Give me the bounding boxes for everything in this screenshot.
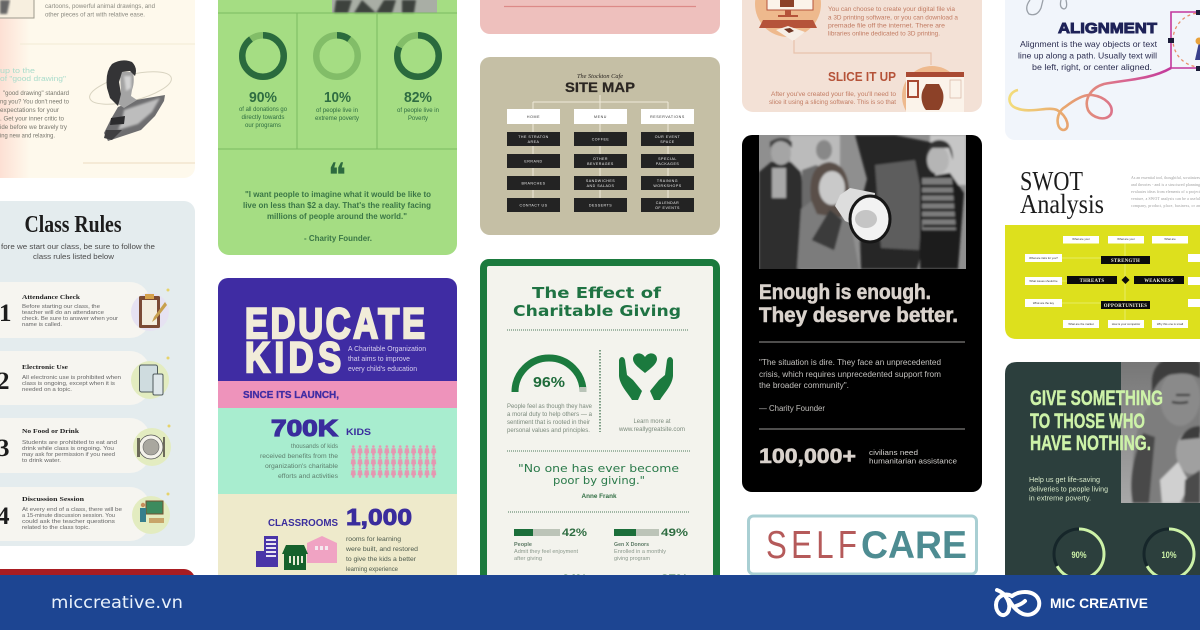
- text: slice: After you've created your file, you'll need to: [771, 91, 897, 98]
- title: educate kids: KIDS: [245, 334, 346, 382]
- text: good drawing body: expectations for your: [0, 107, 59, 114]
- icon: green building: [282, 545, 308, 570]
- text: organisation description: [348, 344, 426, 373]
- rule row 2: electronic use: [0, 351, 170, 405]
- panel: class rules: [0, 201, 195, 546]
- text: help us: [1029, 477, 1108, 502]
- heading: good drawing: [0, 66, 66, 83]
- footer bar: [0, 575, 1200, 630]
- quote: crisis, which requires unprecedented support from: [759, 370, 941, 379]
- band: 700K kids: KIDS: [346, 427, 371, 438]
- sitemap column: home: ERRAND: [524, 160, 543, 164]
- sitemap column: menu: COFFEE: [592, 138, 609, 142]
- stat: 90 percent: 90%: [249, 89, 277, 106]
- stat bar: 49 percent gen x: Gen X Donors: [614, 542, 649, 548]
- text: organisation description: every child's education: [348, 364, 417, 373]
- text: help us: Help us get life-saving: [1029, 477, 1100, 484]
- sitemap column: reservations: SPECIAL: [658, 157, 677, 161]
- footer brand name: MIC CREATIVE: [1050, 595, 1148, 611]
- illustration: colour curve: [1009, 68, 1171, 130]
- icon: purple tower: [256, 536, 278, 567]
- text: alignment definition: Alignment is the way objects or text: [1020, 39, 1158, 49]
- stat bar: 42 percent people: 42%: [562, 527, 587, 539]
- title: effect of charitable giving: [513, 284, 681, 320]
- band: since its launch: SINCE ITS LAUNCH,: [243, 389, 339, 401]
- title: educate kids: EDUCATE: [245, 300, 428, 348]
- band: classrooms 1,000: to give the kids a better: [346, 556, 417, 563]
- text: moral duty: [507, 403, 592, 434]
- rule row 1: attendance check: Before starting our class, the: [22, 304, 100, 310]
- text: swot description: and theories - and is a structured planning: [1131, 183, 1200, 187]
- prompt text: What are the market: [1068, 322, 1094, 326]
- sitemap column: menu: BEVERAGES: [587, 162, 614, 166]
- band: classrooms 1,000: 1,000: [346, 504, 412, 530]
- rule row 2: electronic use: Electronic Use: [22, 364, 68, 371]
- band: 700K kids: received benefits from the: [260, 453, 338, 460]
- icon: clipboard: [131, 288, 170, 331]
- rule row 4: discussion session: could ask the teacher questions: [22, 519, 116, 525]
- heading: good drawing: up to the: [0, 66, 35, 75]
- title: effect of charitable giving: The Effect of: [532, 284, 661, 302]
- title: swot analysis: SWOT: [1020, 166, 1083, 196]
- band: classrooms 1,000: were built, and restored: [345, 546, 418, 553]
- rule row 4: discussion session: Discussion Session: [22, 496, 84, 503]
- sitemap column: home: [507, 109, 560, 212]
- rule row 4: discussion session: [0, 487, 170, 541]
- title: site map: The Stockton Cafe: [577, 73, 623, 80]
- stat: 10 percent: [315, 89, 359, 122]
- title: site map: [565, 73, 635, 95]
- text: help us: in extreme poverty.: [1029, 496, 1091, 502]
- stat: 82 percent: 82%: [404, 89, 432, 106]
- text: intro end: other pieces of art with relative ease.: [45, 12, 145, 18]
- prompt text: [1029, 237, 1184, 326]
- stat bar: 49 percent gen x: [614, 527, 688, 562]
- stat: 82 percent: Poverty: [408, 116, 428, 122]
- quote: [759, 358, 941, 413]
- sitemap column: home: THE STRATON: [518, 135, 549, 139]
- stat bar: 42 percent people: [514, 527, 587, 562]
- quote: anne frank: "No one has ever become: [518, 462, 679, 475]
- pictogram: rows of children: [350, 445, 437, 478]
- text: help us: deliveries to people living: [1029, 486, 1108, 494]
- quote: anne frank: [518, 462, 679, 500]
- sitemap column: reservations: CALENDAR: [656, 201, 679, 205]
- rule row 1: attendance check: [0, 282, 170, 338]
- band: 700K kids: efforts and activities: [278, 473, 339, 480]
- title: swot analysis: [1020, 166, 1104, 219]
- prompt text: What are risks for you?: [1029, 256, 1058, 260]
- panel: green charity donuts: [218, 0, 457, 255]
- stat: 90 percent: directly towards: [242, 115, 284, 121]
- cut-off stats: [562, 573, 688, 585]
- quote text: [243, 190, 431, 243]
- panel: alignment: [1005, 0, 1200, 140]
- text: alignment definition: line up along a path. Usually text will: [1018, 50, 1157, 60]
- sitemap column: reservations: OF EVENTS: [655, 206, 680, 210]
- footer site url: miccreative.vn: [51, 593, 183, 613]
- prompt text: How is your competitor: [1112, 322, 1140, 326]
- cut-off stats: 37%: [661, 573, 688, 585]
- headline: [1030, 387, 1163, 455]
- icon: hands holding heart: [619, 353, 673, 400]
- panel: site map: [480, 57, 720, 235]
- rule row 3: no food or drink: drink while class is ongoing. You: [22, 446, 114, 452]
- text: swot description: As an essential tool, thoughtful, scrutinizes: [1131, 176, 1200, 181]
- title: educate kids: [245, 300, 428, 382]
- sitemap column: reservations: WORKSHOPS: [653, 184, 682, 188]
- sitemap column: home: BRANCHES: [522, 182, 546, 186]
- panel: effect of charitable giving: [480, 259, 720, 589]
- stat: 90 percent: [239, 89, 288, 129]
- stat bar: 42 percent people: Admit they feel enjoyment: [514, 549, 578, 555]
- text: digital file: You can choose to create your digital file via: [828, 6, 956, 13]
- text: digital file: libraries online dedicated to 3D printing.: [828, 30, 940, 38]
- icon: teacher at blackboard: [132, 492, 170, 534]
- text: learn more: Learn more at: [634, 418, 671, 425]
- gauge: 96 percent: [515, 358, 586, 392]
- category label text: THREATS: [1080, 279, 1104, 284]
- panel: educate kids: [218, 278, 457, 584]
- category label text: STRENGTH: [1111, 259, 1140, 264]
- rule row 4: discussion session: related to the class topic.: [22, 525, 90, 531]
- rule row 4: discussion session: At every end of a class, there will be: [22, 507, 122, 513]
- category label text: OPPORTUNITIES: [1104, 304, 1147, 309]
- text: intro end: cartoons, powerful animal drawings, and: [45, 3, 155, 10]
- photo strip: [332, 0, 437, 13]
- sitemap column: menu: AND SALADS: [587, 184, 614, 188]
- quote: the broader community".: [759, 381, 849, 390]
- quote: — Charity Founder: [759, 404, 825, 413]
- ring: 10 percent: 10%: [1162, 550, 1176, 560]
- quote: "The situation is dire. They face an unprecedented: [759, 358, 941, 367]
- icon: MIC Creative logo: [996, 590, 1039, 615]
- sitemap column: home: HOME: [527, 115, 540, 119]
- text: digital file: [828, 6, 958, 38]
- rule row 4: discussion session: a 15-minute discussion session. You: [22, 513, 115, 519]
- prompt text: What are: [1164, 237, 1176, 241]
- ring: 90 percent: 90%: [1072, 550, 1086, 560]
- sitemap column: menu: [574, 109, 627, 212]
- band: classrooms 1,000: rooms for learning: [346, 536, 401, 543]
- icon: quotation marks: ❝: [328, 156, 346, 196]
- title: site map: SITE MAP: [565, 79, 635, 95]
- sitemap column: reservations: SPACE: [660, 140, 675, 144]
- donut: 82 percent: [397, 35, 439, 77]
- headline: TO THOSE WHO: [1030, 410, 1145, 433]
- text: intro end: [45, 3, 155, 18]
- stat: 90 percent: our programs: [245, 123, 281, 129]
- text: digital file: a 3D printing software, or you can download a: [828, 14, 958, 22]
- rule row 2: electronic use: All electronic use is prohibited when: [22, 375, 121, 381]
- text: digital file: premade file off the internet. There are: [828, 22, 946, 30]
- text: moral duty: a moral duty to help others — a: [507, 411, 592, 418]
- band: classrooms 1,000: CLASSROOMS: [268, 518, 338, 529]
- stat bar: 49 percent gen x: 49%: [661, 527, 688, 539]
- text: swot description: [1131, 176, 1200, 209]
- prompt text: What are the key: [1033, 301, 1055, 305]
- panel: self care: CARE: [861, 524, 967, 567]
- rule row 3: no food or drink: may ask for permission if you need: [22, 452, 115, 458]
- text: good drawing body: . Get your inner critic to: [0, 116, 64, 122]
- text: organisation description: that aims to improve: [348, 354, 410, 363]
- panel: give something: [1005, 358, 1200, 590]
- prompt text: Why this one is small: [1157, 322, 1184, 326]
- rule row 1: attendance check: Attendance Check: [22, 294, 80, 301]
- band: 700K kids: thousands of kids: [291, 443, 339, 450]
- panel: red card: [0, 569, 195, 609]
- text: class rules intro: fore we start our class, be sure to follow the: [1, 242, 155, 251]
- yellow swot board: [1005, 225, 1200, 339]
- image frame top left: [0, 0, 34, 18]
- text: swot description: company, product, place, business, or an: [1131, 204, 1200, 209]
- rule row 3: no food or drink: to drink water.: [22, 458, 61, 464]
- heading: slice it up: SLICE IT UP: [828, 69, 896, 84]
- heading: alignment: ALIGNMENT: [1058, 21, 1157, 37]
- heading: good drawing: of "good drawing": [0, 74, 66, 83]
- title: effect of charitable giving: Charitable Giving: [513, 302, 681, 320]
- panel: 3D printing steps: [742, 0, 982, 112]
- text: good drawing body: [0, 90, 69, 140]
- text: good drawing body: "good drawing" standard: [3, 90, 69, 97]
- stat caption: [869, 448, 957, 466]
- quote text: "I want people to imagine what it would be like to: [245, 190, 431, 199]
- quote text: - Charity Founder.: [304, 234, 372, 243]
- sitemap column: home: AREA: [528, 140, 539, 144]
- rule row 1: attendance check: check. Be sure to answer when your: [22, 316, 118, 322]
- rule row 1: attendance check: teacher will do an attendance: [22, 310, 104, 316]
- stat bar: 49 percent gen x: Enrolled in a monthly: [614, 549, 666, 555]
- quote: anne frank: poor by giving.": [553, 474, 645, 487]
- headline: HAVE NOTHING.: [1030, 432, 1151, 455]
- sitemap column: home: CONTACT US: [519, 204, 548, 208]
- sitemap column: menu: MENU: [594, 115, 607, 119]
- text: moral duty: personal values and principles.: [507, 427, 590, 434]
- ring: 10 percent: [1144, 529, 1194, 579]
- text: swot description: evaluates ideas from elements of a project: [1131, 190, 1200, 194]
- stat: 82 percent: [397, 89, 439, 122]
- stat bar: 42 percent people: People: [514, 542, 532, 548]
- ring: 90 percent: [1054, 529, 1104, 579]
- panel: self care: SELF: [766, 524, 861, 567]
- sitemap column: reservations: RESERVATIONS: [650, 115, 685, 119]
- text: swot description: venture, a SWOT analysis can be a useful: [1131, 197, 1200, 202]
- title: class rules: Class Rules: [24, 212, 122, 238]
- prompt text: What issues should be: [1029, 279, 1058, 283]
- text: organisation description: A Charitable Organization: [348, 344, 426, 353]
- photo: children: [1121, 358, 1200, 503]
- text: learn more: www.reallygreatsite.com: [618, 426, 685, 433]
- cut-off stats: 64%: [562, 573, 587, 585]
- donut: 10 percent: [316, 35, 358, 77]
- panel: self care: [748, 516, 976, 574]
- category label text: [1080, 259, 1174, 309]
- panel: drawing tips (cream): [0, 0, 195, 178]
- stat: 10 percent: of people live in: [316, 108, 358, 114]
- quote text: live on less than $2 a day. That's the reality facing: [243, 201, 431, 210]
- rule row 3: no food or drink: [0, 418, 171, 473]
- text: slice: [769, 91, 897, 106]
- category label text: WEAKNESS: [1144, 279, 1174, 284]
- band: 700K kids: [218, 408, 457, 494]
- photo: protest with megaphone: [759, 135, 966, 272]
- rule row 3: no food or drink: Students are prohibited to eat and: [22, 440, 117, 446]
- band: classrooms 1,000: learning experience: [346, 566, 398, 573]
- text: good drawing body: ng you? You don't need to: [0, 98, 69, 106]
- illustration: alignment frame: [1168, 10, 1200, 71]
- icon: pink house: [307, 536, 337, 563]
- text: moral duty: sentiment that is rooted in their: [507, 419, 590, 426]
- headline: They deserve better.: [759, 304, 958, 327]
- gauge: 96 percent: 96%: [533, 374, 565, 391]
- stat: 100,000+: 100,000+: [759, 445, 856, 468]
- rule row 2: electronic use: needed on a topic.: [22, 387, 72, 393]
- icon: statue bust with orbit ring: [87, 60, 174, 141]
- stat caption: civilians need: [869, 448, 918, 457]
- text: alignment definition: [1018, 39, 1158, 72]
- sitemap column: reservations: TRAINING: [657, 179, 678, 183]
- sitemap column: menu: DESSERTS: [589, 204, 612, 208]
- stat bar: 42 percent people: after giving: [514, 556, 542, 562]
- panel: pink card: [480, 0, 720, 34]
- text: good drawing body: ide before we bravely try: [0, 124, 68, 131]
- stat: 10 percent: extreme poverty: [315, 116, 359, 122]
- text: good drawing body: ing new and relaxing.: [0, 132, 55, 140]
- band: since its launch: [218, 381, 457, 408]
- text: alignment definition: be left, right, or center aligned.: [1032, 62, 1152, 72]
- title: swot analysis: Analysis: [1020, 189, 1104, 219]
- rule row 3: no food or drink: No Food or Drink: [22, 428, 79, 435]
- text: slice: slice it using a slicing software. This is so that: [769, 99, 896, 106]
- band: classrooms 1,000: [218, 494, 457, 584]
- stat bar: 49 percent gen x: giving program: [614, 556, 650, 562]
- icon: computer with circle: [755, 0, 821, 41]
- stat: 82 percent: of people live in: [397, 108, 439, 114]
- panel: swot analysis: [1005, 166, 1200, 339]
- quote: anne frank: Anne Frank: [582, 493, 617, 500]
- prompt text: What are your: [1072, 237, 1090, 241]
- icon: slicing software window: [902, 66, 964, 112]
- band: 700K kids: 700K: [271, 415, 338, 441]
- rule row 1: attendance check: name is called.: [22, 322, 62, 328]
- sitemap column: menu: SANDWICHES: [586, 179, 615, 183]
- quote text: millions of people around the world.": [267, 212, 407, 221]
- stat: 90 percent: of all donations go: [239, 107, 288, 113]
- stat: 10 percent: 10%: [324, 89, 351, 106]
- sitemap column: reservations: PACKAGES: [656, 162, 679, 166]
- band: 700K kids: organization's charitable: [265, 463, 338, 470]
- stat caption: humanitarian assistance: [869, 456, 957, 466]
- icon: plate and cutlery: [133, 424, 171, 466]
- sitemap column: menu: OTHER: [593, 157, 608, 161]
- text: class rules intro: class rules listed below: [33, 252, 115, 261]
- rule row 2: electronic use: class is ongoing, except when it is: [22, 381, 115, 387]
- prompt text: What are your: [1117, 237, 1135, 241]
- sitemap column: reservations: OUR EVENT: [655, 135, 681, 139]
- panel: enough is enough: [742, 135, 982, 492]
- text: moral duty: People feel as though they have: [507, 403, 592, 410]
- headline: [759, 281, 958, 327]
- white prompt boxes: [1025, 236, 1200, 328]
- black category labels: [1067, 256, 1184, 309]
- text: class rules intro: [1, 242, 155, 261]
- text: learn more: [618, 418, 685, 433]
- donut: 90 percent: [242, 35, 284, 77]
- icon: tablet and phone: [131, 356, 170, 399]
- headline: Enough is enough.: [759, 281, 931, 304]
- sitemap column: reservations: [641, 109, 694, 212]
